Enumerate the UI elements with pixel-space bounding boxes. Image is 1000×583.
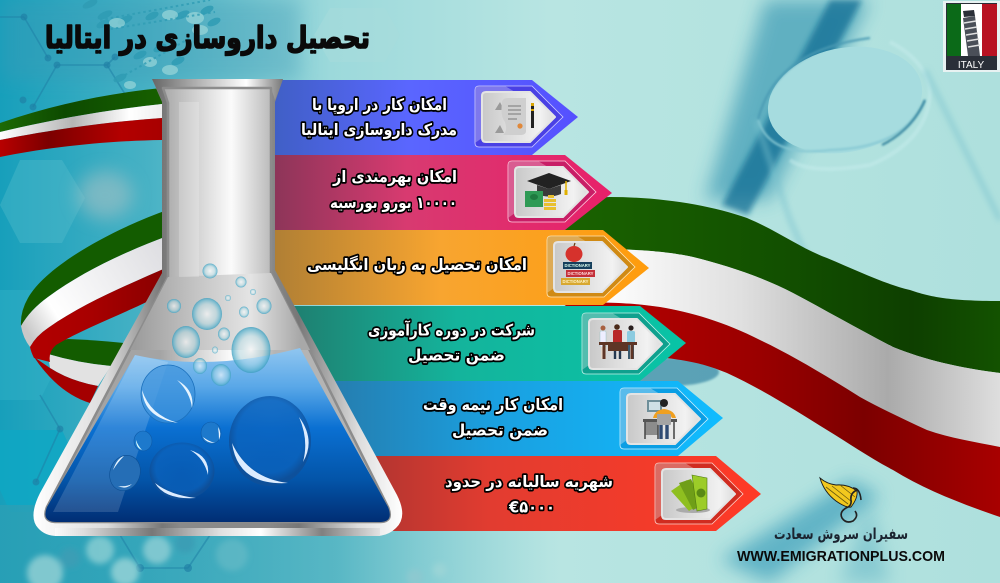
text: row 6: شهریه سالیانه در حدود [445, 472, 613, 491]
badge: certificate icon [475, 86, 563, 147]
ribbon: big left wrap [21, 209, 170, 403]
panel: row 1 [270, 80, 578, 155]
molecule strand [81, 0, 222, 84]
panel: row 5: ضمن تحصیل [452, 420, 548, 440]
icon: winged bird [820, 478, 861, 522]
brand name: سفیران سروش سعادت [774, 525, 908, 543]
flask glass [45, 88, 390, 522]
panel: row 6: €۵۰۰۰ [508, 498, 555, 516]
panel: row 6 [270, 456, 761, 531]
badge: dictionary books icon [547, 236, 635, 297]
logo [737, 478, 945, 565]
badge: banknotes icon [655, 463, 743, 524]
panel: row 3 [270, 230, 649, 305]
website: WWW.EMIGRATIONPLUS.COM [737, 548, 945, 565]
badge: dictionary books icon: DICTIONARY [563, 279, 589, 284]
text: row 1: امکان کار در اروپا با [312, 95, 447, 115]
text: row 2: امکان بهرمندی از [332, 167, 457, 186]
panel: row 1: مدرک داروسازی ایتالیا [301, 120, 457, 139]
title: تحصیل داروسازی در ایتالیا [45, 21, 370, 56]
icon: leaning tower [963, 10, 980, 56]
flask liquid [45, 348, 390, 522]
text: row 5: امکان کار نیمه وقت [423, 395, 563, 414]
bottom blurred molecules [27, 533, 447, 583]
ribbon: right band [560, 197, 1000, 517]
panel: row 4: ضمن تحصیل [408, 346, 505, 364]
bubbles above liquid [167, 264, 272, 386]
badge: dictionary books icon: DICTIONARY [568, 271, 594, 276]
badge: dictionary books icon: DICTIONARY [565, 263, 591, 268]
badge: graduation cap icon [508, 161, 596, 222]
badge: Italy flag with tower [943, 1, 1000, 72]
panel: row 2 [270, 155, 612, 230]
panel: row 5 [270, 381, 723, 456]
panel: row 2: ۱۰۰۰۰ یورو بورسیه [330, 193, 457, 212]
flask outer metal body [33, 79, 402, 536]
badge: internship people icon [582, 313, 670, 374]
text: row 4: شرکت در دوره کارآموزی [368, 320, 535, 340]
ribbon: top left [0, 88, 162, 157]
background: test tube [623, 0, 1000, 583]
flask [33, 79, 402, 536]
panel: row 4 [270, 306, 686, 381]
badge: part-time desk worker icon [620, 388, 708, 449]
text: row 3: امکان تحصیل به زبان انگلیسی [307, 255, 527, 274]
label: ITALY: ITALY [958, 60, 984, 71]
bubbles in liquid [105, 365, 311, 500]
